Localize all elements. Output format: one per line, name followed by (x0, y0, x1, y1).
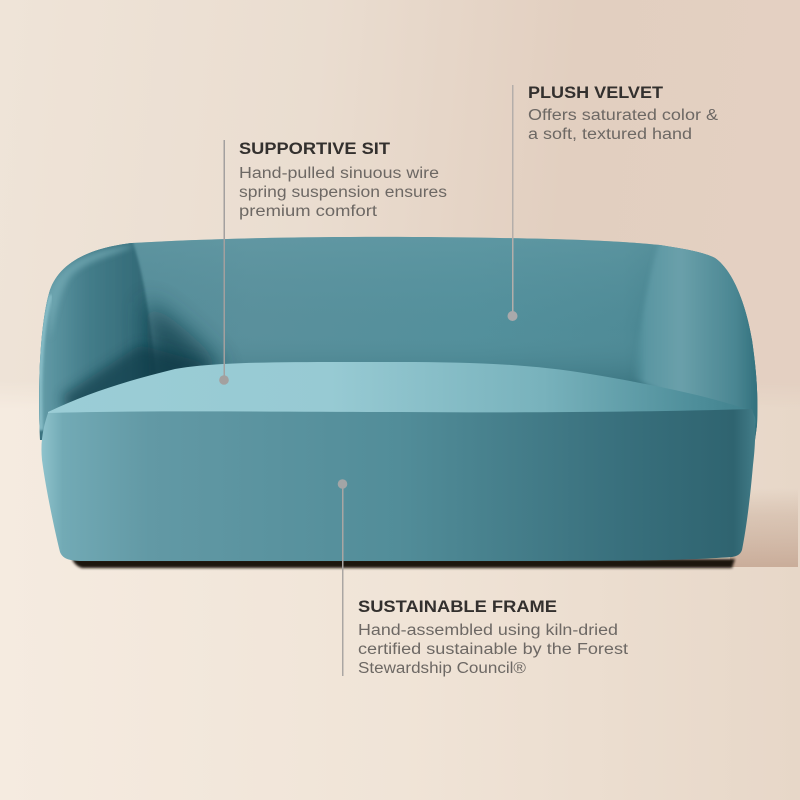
body text: certified sustainable by the Forest (358, 641, 629, 658)
body text: Offers saturated color & (528, 107, 719, 124)
callout: sustainable frame (338, 479, 629, 677)
leader line and dot (219, 140, 229, 385)
sofa floor shadow (72, 559, 735, 568)
body text: spring suspension ensures (239, 184, 447, 201)
callout: plush velvet (508, 83, 719, 321)
sofa back (39, 236, 758, 440)
right arm panel (637, 244, 758, 435)
arm top highlight (49, 244, 132, 325)
body text: a soft, textured hand (528, 126, 692, 143)
heading: PLUSH VELVET (528, 83, 664, 102)
body text: premium comfort (239, 203, 378, 220)
outer left edge light (40, 295, 51, 430)
leader line and dot (508, 85, 518, 321)
left arm (39, 243, 153, 431)
heading: SUPPORTIVE SIT (239, 139, 391, 158)
sofa (30, 230, 770, 568)
sofa seat top (48, 362, 756, 426)
callout: supportive sit (219, 139, 447, 385)
body text: Hand-pulled sinuous wire (239, 165, 439, 182)
leader line and dot (338, 479, 347, 676)
body text: Hand-assembled using kiln-dried (358, 622, 618, 639)
heading: SUSTAINABLE FRAME (358, 597, 557, 616)
sofa front base (41, 409, 755, 561)
shadow beside left arm (146, 300, 222, 395)
body text: Stewardship Council® (358, 660, 527, 677)
